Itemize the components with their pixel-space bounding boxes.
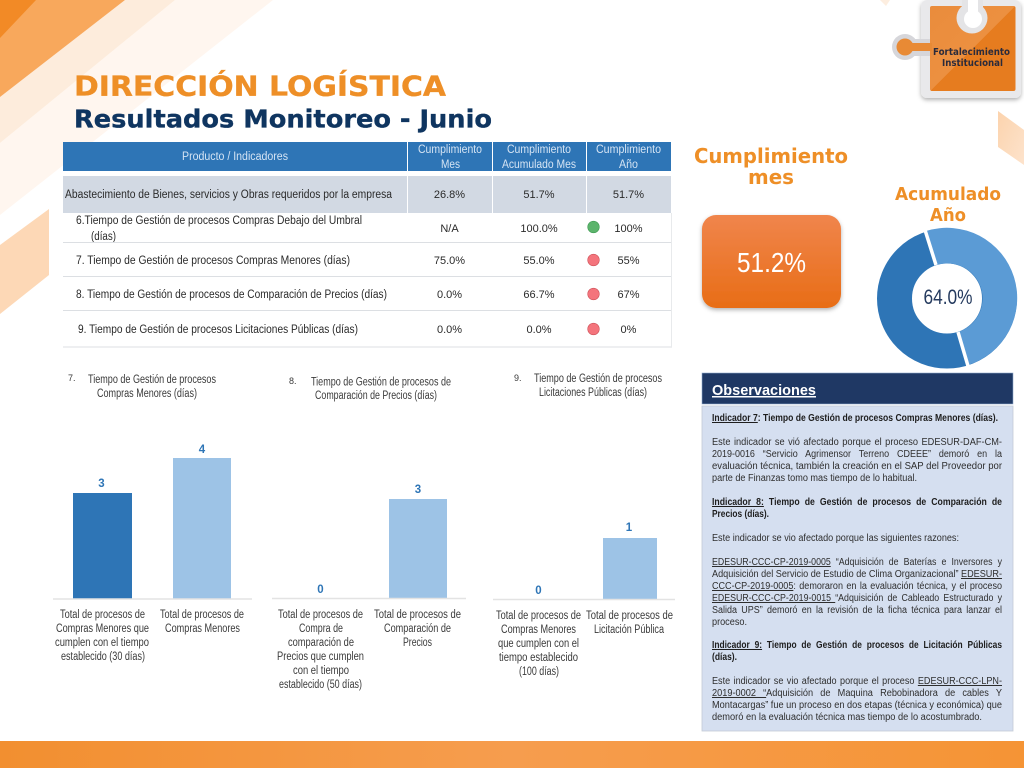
row 6: 6.Tiempo de Gestión de procesos Compras Debajo del Umbral (76, 215, 362, 227)
observation text: indicador 7: Este indicador se vió afectado porque el proceso EDESUR-DAF-CM- (712, 437, 1002, 448)
observation text: indicador 9: (días). (712, 652, 737, 663)
decorative background shapes (0, 0, 1024, 314)
chart 7 bars (53, 444, 252, 599)
row 7: 7. Tiempo de Gestión de procesos Compras Menores (días) (76, 255, 350, 267)
heading: Cumplimiento mes: Cumplimiento (694, 144, 848, 168)
chart 8 title: Comparación de Precios (días) (315, 390, 437, 402)
table header (63, 142, 671, 171)
row 7: 55% (617, 255, 640, 267)
chart 7 bars: 4 (199, 444, 206, 456)
chart 9 axis labels: Total de procesos de (496, 610, 581, 622)
chart 7 title (68, 373, 216, 400)
KPI box 51.2%: 51.2% (737, 247, 806, 278)
table header: Producto / Indicadores (182, 151, 288, 163)
chart 8 axis labels: Total de procesos de (278, 609, 363, 621)
panel body (702, 406, 1013, 731)
observation text: indicador 8: proceso. (712, 617, 747, 628)
observation text: indicador 7 (712, 413, 1003, 484)
row 9: 9. Tiempo de Gestión de procesos Licitaciones Públicas (días) (78, 324, 358, 336)
chart 9 title: Tiempo de Gestión de procesos (534, 373, 662, 385)
chart 7 axis labels: cumplen con el tiempo (55, 637, 149, 649)
row 8: 0.0% (437, 289, 462, 301)
row 9: 0% (621, 324, 637, 336)
chart 9 axis labels: tiempo establecido (499, 652, 578, 664)
chart 9 title: Licitaciones Públicas (días) (539, 387, 647, 399)
chart 8 title (289, 376, 451, 402)
chart 8 bars: 0 (317, 584, 324, 596)
table header: Cumplimiento (507, 144, 571, 156)
observation text: indicador 7: evaluación técnica, también la creación en el SAP del Proveedor por (712, 461, 1003, 472)
heading: Acumulado Año: Año (930, 205, 966, 226)
observation text: indicador 9: 2019-0002 “Adquisición de Maquina Rebobinadora de cables Y (712, 688, 1002, 699)
chart 7 axis labels: establecido (30 días) (61, 651, 145, 663)
observation text: indicador 8: EDESUR-CCC-CP-2019-0005 “Adquisición de Baterías e Inversores y (712, 557, 1002, 568)
icon: puzzle logo Fortalecimiento Institucional (892, 0, 1021, 98)
chart 8 axis labels: Comparación de (384, 623, 451, 635)
chart 8 title: Tiempo de Gestión de procesos de (311, 376, 451, 388)
logo text (933, 47, 1010, 69)
observation text: indicador 8 (712, 497, 1002, 628)
summary row (63, 176, 671, 213)
chart 7 title: Compras Menores (días) (97, 388, 197, 400)
chart 9: Licitaciones Públicas (493, 373, 675, 678)
row 7: 55.0% (523, 255, 555, 267)
chart 9 axis labels: Licitación Pública (594, 624, 664, 636)
table header: Mes (441, 159, 460, 171)
chart 8 axis labels: comparación de (288, 637, 354, 649)
logo text: Institucional (942, 58, 1003, 69)
chart 9 axis labels (496, 610, 673, 678)
chart 8 axis labels: Total de procesos de (374, 609, 461, 621)
chart 9 axis labels: Compras Menores (501, 624, 576, 636)
chart 8 axis labels: Compra de (299, 623, 343, 635)
row 7: 75.0% (434, 255, 465, 267)
table header: Cumplimiento (596, 144, 661, 156)
panel: observaciones (702, 373, 1013, 731)
row 6: N/A (440, 223, 459, 235)
observation text: indicador 8: CCC-CP-2019-0005: demoraron en la evaluación técnica, y el proceso (712, 581, 1002, 592)
chart 8 axis labels: Precios (403, 637, 432, 649)
row 8 (76, 288, 640, 301)
chart 8: Comparación de Precios (272, 376, 466, 691)
footer bar (0, 741, 1024, 768)
chart 7: Compras Menores (53, 373, 252, 663)
donut chart 64.0%: 64.0% (924, 286, 972, 309)
summary row: 51.7% (523, 189, 555, 201)
chart 9 title: 9. (514, 373, 522, 383)
chart 9 bars: 0 (535, 585, 542, 597)
observation text: indicador 9: demoró en la evaluación técnica mas tiempo de lo acostumbrado. (712, 712, 982, 723)
row 9: 0.0% (437, 324, 462, 336)
chart 8 axis labels: con el tiempo (293, 665, 349, 677)
heading: Acumulado Año (895, 184, 1001, 226)
chart 7 axis labels: Total de procesos de (160, 609, 244, 621)
observation text: indicador 7: parte de Finanzas tomo mas tiempo de lo habitual. (712, 473, 917, 484)
row 8: 67% (617, 289, 640, 301)
observation text: indicador 9 (712, 640, 1002, 723)
chart 8 bars (272, 484, 466, 598)
summary row: 26.8% (434, 189, 465, 201)
panel header (702, 373, 1013, 404)
observation text: indicador 8: EDESUR-CCC-CP-2019-0015 “Adquisición de Cableado Estructurado y (712, 593, 1002, 604)
row 7 (76, 254, 640, 267)
observation text: indicador 8: Precios (días). (712, 509, 769, 520)
chart 9 title (514, 373, 662, 399)
chart 7 axis labels: Compras Menores que (56, 623, 149, 635)
panel header: Observaciones (712, 382, 816, 399)
table header: Acumulado Mes (502, 159, 576, 171)
table header: Año (619, 159, 638, 171)
row 6: 100.0% (520, 223, 558, 235)
row 9 (78, 323, 637, 336)
chart 7 title: Tiempo de Gestión de procesos (88, 374, 216, 386)
observation text: indicador 8: Este indicador se vio afectado porque las siguientes razones: (712, 533, 959, 544)
chart 9 axis labels: (100 días) (519, 666, 559, 678)
row 8: 8. Tiempo de Gestión de procesos de Comparación de Precios (días) (76, 289, 387, 301)
logo text: Fortalecimiento (933, 47, 1010, 58)
chart 9 axis labels: que cumplen con el (498, 638, 579, 650)
table header: Cumplimiento (418, 144, 482, 156)
chart 9 bars (493, 522, 675, 600)
row 9: 0.0% (526, 324, 552, 336)
summary row: 51.7% (613, 189, 644, 201)
chart 8 axis labels: establecido (50 días) (279, 679, 362, 691)
summary row: Abastecimiento de Bienes, servicios y Obras requeridos por la empresa (65, 189, 393, 201)
subtitle: Resultados Monitoreo - Junio (74, 104, 492, 134)
chart 8 axis labels: Precios que cumplen (277, 651, 364, 663)
row 6: 100% (614, 223, 643, 235)
heading: Cumplimiento mes (694, 144, 848, 189)
chart 9 axis labels: Total de procesos de (586, 610, 673, 622)
observation text: indicador 8: Adquisición del Servicio de Estudio de Clima Organizacional” EDESUR- (712, 569, 1002, 580)
chart 7 axis labels: Compras Menores (165, 623, 240, 635)
chart 8 title: 8. (289, 376, 297, 386)
chart 7 title: 7. (68, 373, 76, 383)
chart 7 bars: 3 (98, 478, 105, 490)
title: DIRECCIÓN LOGÍSTICA (74, 68, 447, 102)
row 8: 66.7% (523, 289, 555, 301)
observation text: indicador 9: Este indicador se vio afectado porque el proceso EDESUR-CCC-LPN- (712, 676, 1002, 687)
chart 9 bars: 1 (626, 522, 633, 534)
table: indicadores (63, 142, 672, 347)
row 6: (días) (91, 231, 116, 243)
heading: Cumplimiento mes: mes (748, 165, 794, 189)
row 6 (76, 215, 643, 243)
heading: Acumulado Año: Acumulado (895, 184, 1001, 205)
chart 7 axis labels: Total de procesos de (60, 609, 145, 621)
observation text: indicador 9: Montacargas” fue un proceso en dos etapas (técnica y económica) que (712, 700, 1002, 711)
chart 7 axis labels (55, 609, 244, 663)
donut chart 64.0% (894, 228, 1017, 366)
KPI box 51.2% (702, 215, 841, 308)
chart 8 bars: 3 (415, 484, 421, 496)
chart 8 axis labels (277, 609, 461, 691)
